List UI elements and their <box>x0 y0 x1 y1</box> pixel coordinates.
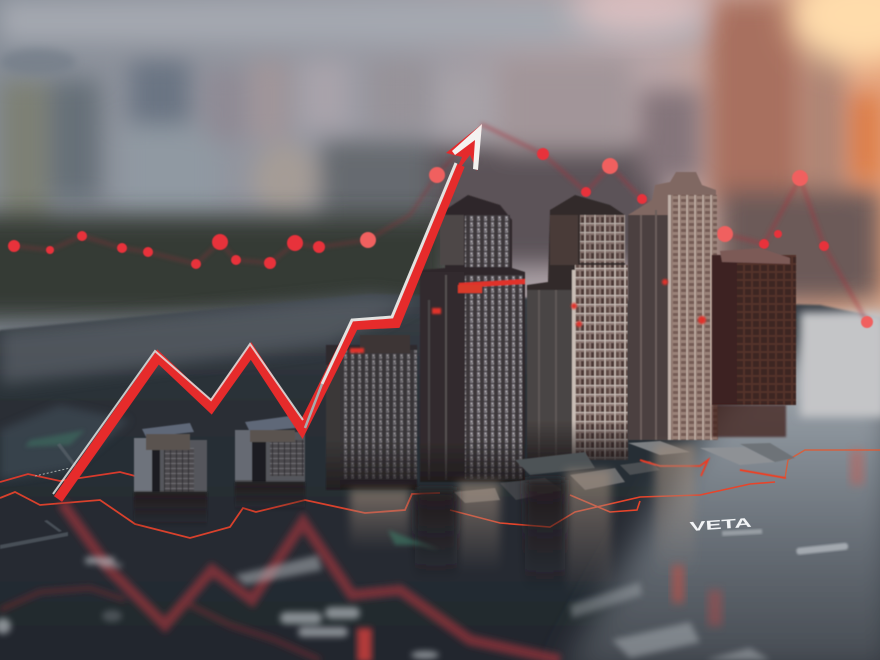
tower 4 <box>420 195 525 482</box>
small building left <box>134 423 207 492</box>
small building middle <box>235 416 305 482</box>
blurred foreground red reflection of arrow <box>0 503 560 660</box>
arrow head <box>446 124 482 176</box>
tower 6 <box>628 172 718 440</box>
rising red arrow <box>53 124 482 499</box>
blurred foreground chart labels <box>0 555 770 660</box>
tower 5 <box>527 195 628 460</box>
red accents on towers <box>350 279 706 353</box>
tower 3 <box>326 335 417 490</box>
blurred city background <box>0 0 880 345</box>
tower 7 <box>712 248 796 405</box>
middle building reflection <box>235 482 305 512</box>
table chart lines and data marks <box>0 443 880 549</box>
circuit-like panels at tower bases <box>454 441 795 503</box>
tower reflections in table <box>350 445 864 660</box>
dark reflective table surface <box>0 294 880 660</box>
table label: VETA: VETA <box>689 515 753 534</box>
left building reflection <box>134 492 207 528</box>
table label: VETA <box>689 515 848 555</box>
tower 7 reflection <box>712 405 786 437</box>
background red line chart with dots <box>8 124 873 328</box>
